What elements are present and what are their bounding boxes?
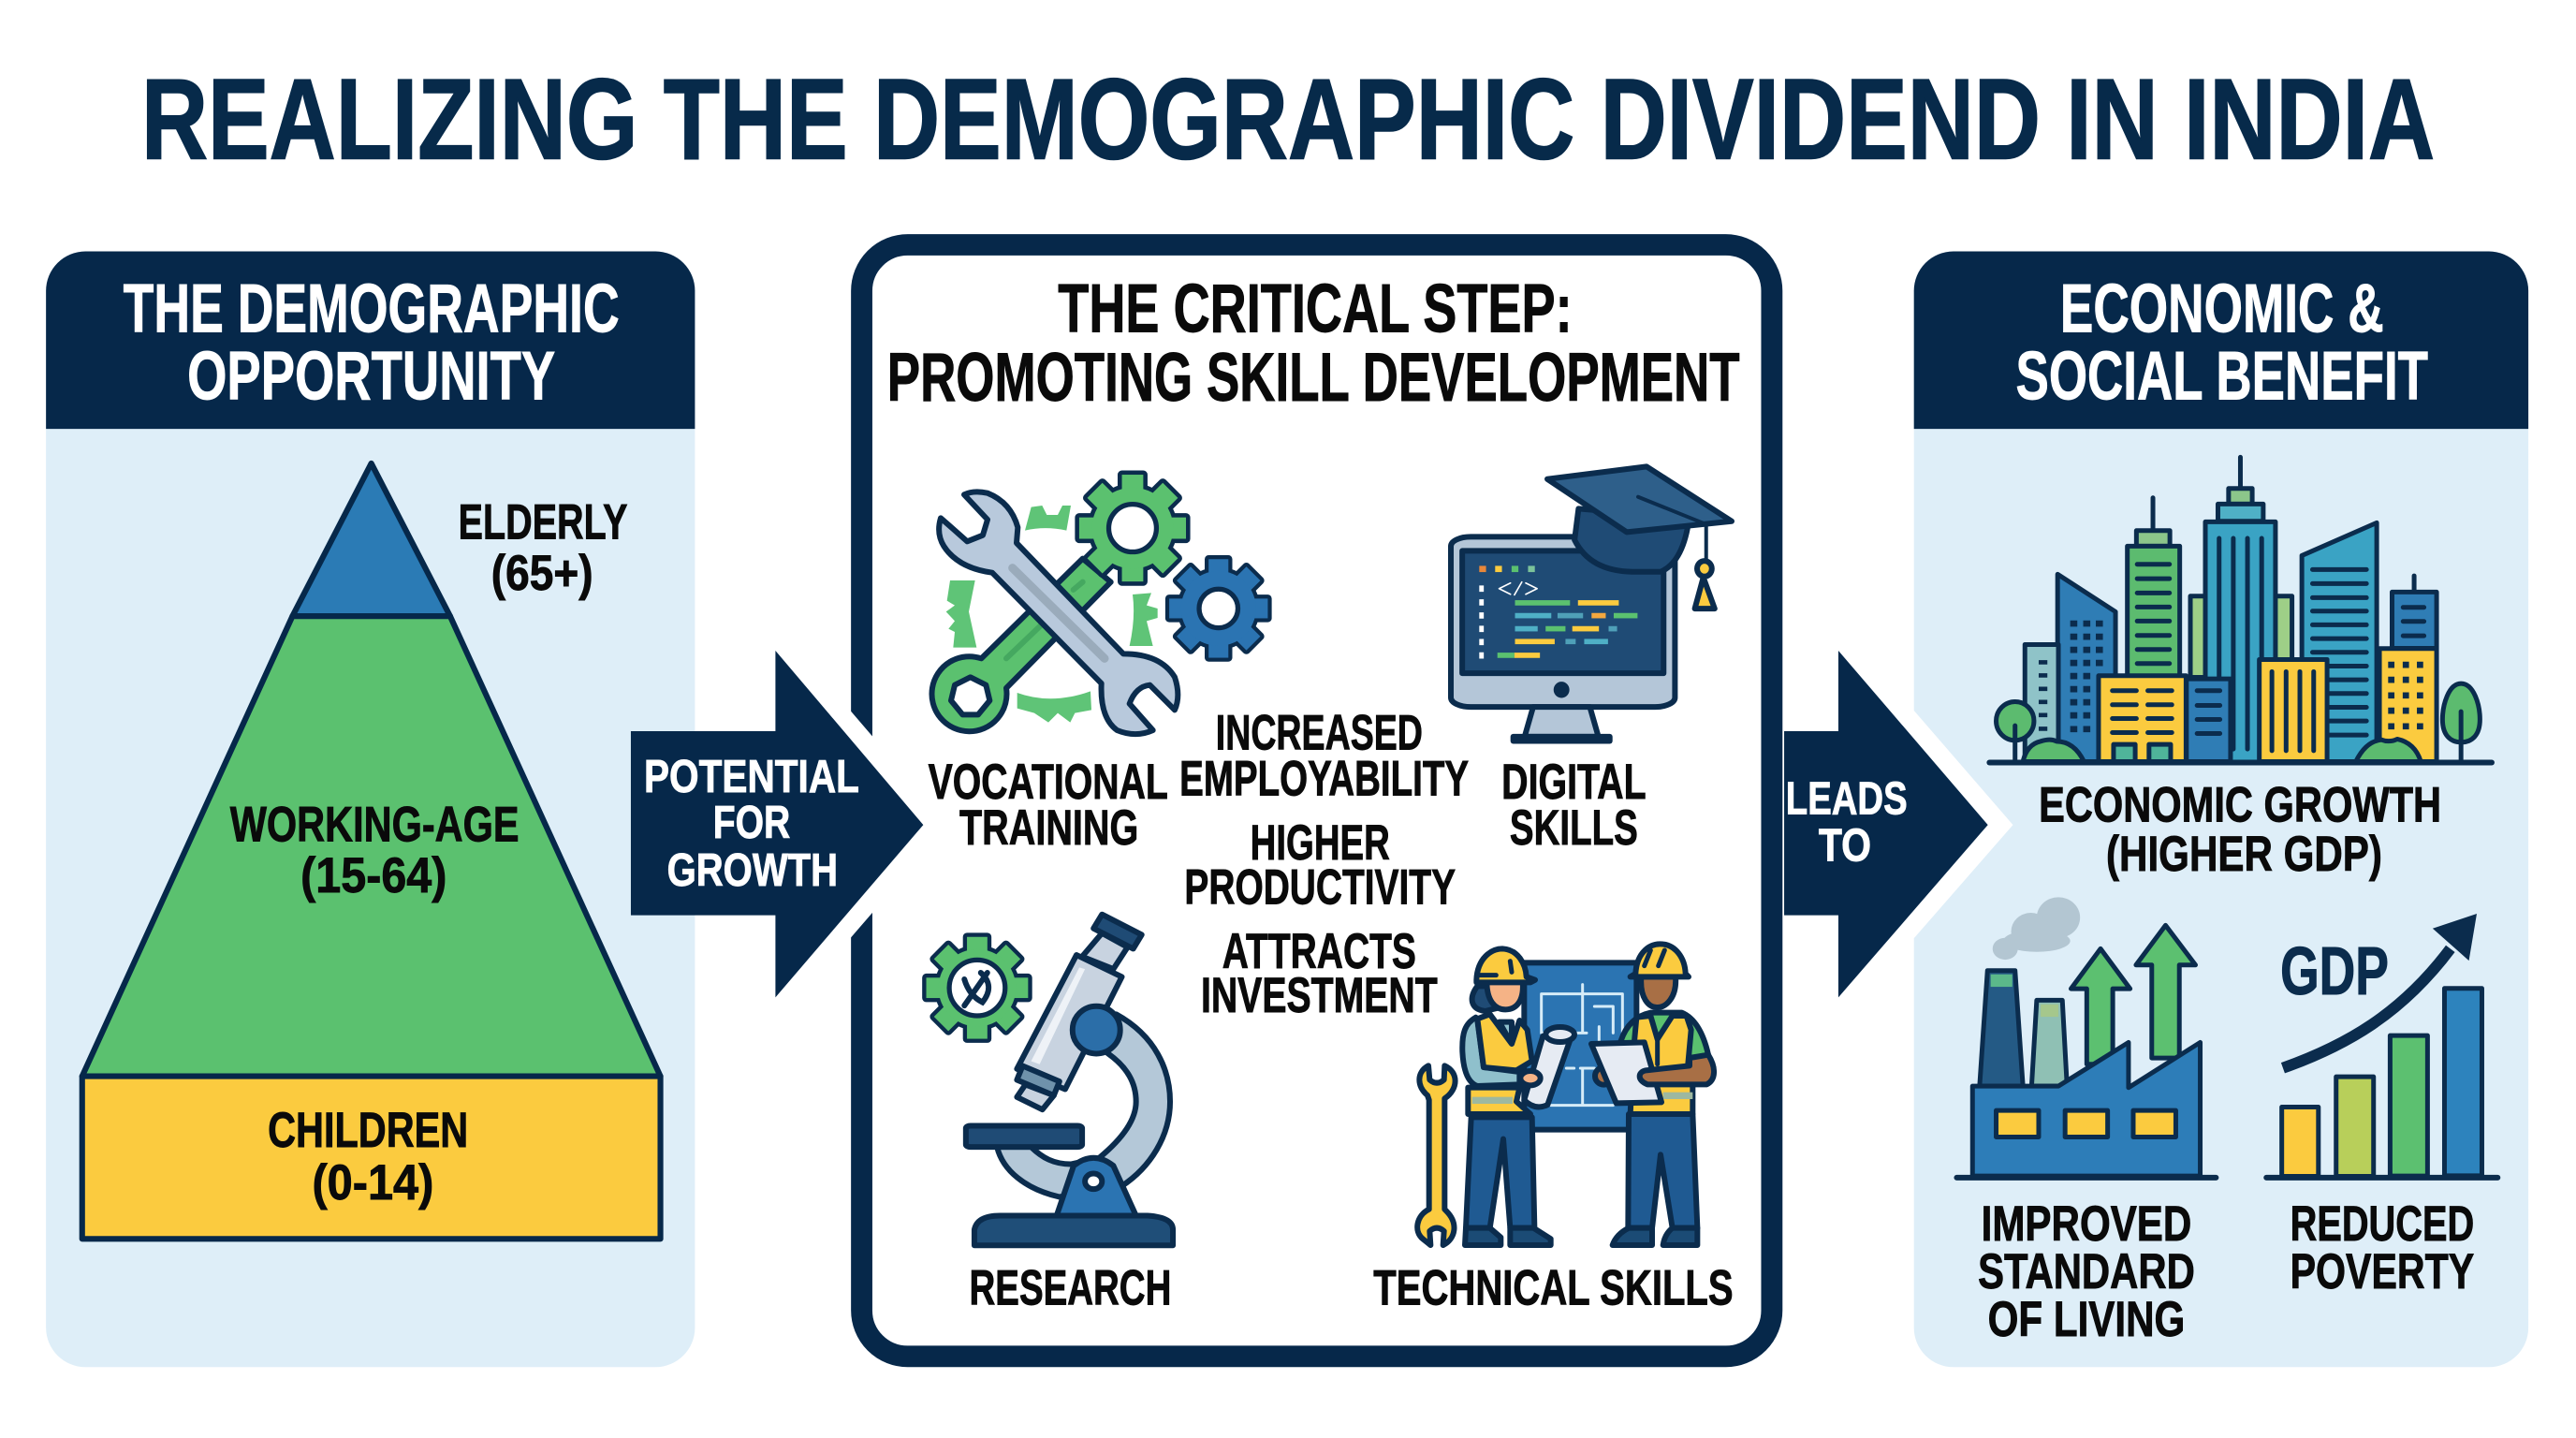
arrow: leads to: TO — [1819, 821, 1871, 872]
icon: wrenches and gears — [931, 475, 1267, 734]
text block: outcomes of skill development: EMPLOYABILITY — [1179, 751, 1469, 806]
label: digital skills: DIGITAL — [1501, 755, 1647, 810]
label: digital skills: SKILLS — [1510, 800, 1638, 856]
label: improved standard of living: OF LIVING — [1988, 1292, 2185, 1347]
label: working-age: (15-64) — [300, 848, 446, 903]
panel heading: economic and social benefit — [2016, 270, 2428, 414]
label: elderly: (65+) — [491, 546, 593, 601]
figure: right engineer — [1591, 944, 1714, 1245]
text block: outcomes of skill development: PRODUCTIVITY — [1184, 859, 1456, 915]
panel heading: economic and social benefit: ECONOMIC & — [2060, 270, 2384, 347]
label: research: RESEARCH — [970, 1261, 1171, 1316]
panel heading: economic and social benefit: SOCIAL BENEFIT — [2016, 336, 2428, 414]
label: economic growth — [2039, 778, 2441, 882]
label: elderly: ELDERLY — [459, 495, 627, 550]
panel heading: the demographic opportunity — [124, 270, 620, 414]
label: technical skills: TECHNICAL SKILLS — [1373, 1261, 1734, 1316]
arrow: leads to — [1784, 640, 1998, 1007]
label: digital skills — [1501, 755, 1647, 856]
panel heading: promoting skill development: THE CRITICAL STEP: — [1058, 270, 1573, 347]
panel heading: the demographic opportunity: THE DEMOGRAPHIC — [124, 270, 620, 347]
arrow: potential for growth: POTENTIAL — [644, 752, 859, 802]
label: economic growth: (HIGHER GDP) — [2106, 827, 2382, 882]
label: vocational training: VOCATIONAL — [929, 755, 1168, 810]
panel: the demographic opportunity — [46, 252, 695, 1367]
text block: outcomes of skill development — [1179, 705, 1469, 1023]
icon: computer with graduation cap — [1451, 466, 1732, 741]
panel: the critical step — [862, 245, 1772, 1357]
label: vocational training — [929, 755, 1168, 856]
text block: outcomes of skill development: ATTRACTS — [1222, 924, 1416, 979]
label: vocational training: TRAINING — [959, 800, 1138, 856]
label: children: CHILDREN — [268, 1103, 468, 1158]
icon: gdp bar chart with rising arrow — [2266, 914, 2497, 1178]
panel heading: promoting skill development: PROMOTING SKILL DEVELOPMENT — [887, 338, 1740, 416]
panel heading: promoting skill development — [887, 270, 1740, 416]
label: improved standard of living: IMPROVED — [1982, 1196, 2191, 1252]
arrow: potential for growth: FOR — [713, 798, 790, 848]
label: working-age — [230, 798, 520, 903]
icon: microscope with gear — [927, 915, 1173, 1245]
label: reduced poverty — [2291, 1196, 2474, 1299]
text block: outcomes of skill development: HIGHER — [1251, 815, 1390, 871]
label: working-age: WORKING-AGE — [230, 798, 520, 853]
panel: economic and social benefit — [1914, 252, 2528, 1367]
label: reduced poverty: POVERTY — [2291, 1244, 2474, 1299]
label: children — [268, 1103, 468, 1211]
label: improved standard of living: STANDARD — [1978, 1244, 2195, 1299]
label: elderly — [459, 495, 627, 601]
arrow: potential for growth — [631, 640, 933, 1007]
label: children: (0-14) — [312, 1155, 433, 1211]
label: economic growth: ECONOMIC GROWTH — [2039, 778, 2441, 833]
label: reduced poverty: REDUCED — [2291, 1196, 2474, 1252]
text block: outcomes of skill development: INVESTMENT — [1201, 968, 1438, 1023]
panel heading: the demographic opportunity: OPPORTUNITY — [187, 336, 555, 414]
arrow: leads to: LEADS — [1786, 774, 1908, 825]
chart: population pyramid — [82, 463, 661, 1239]
icon: factory with rising arrows — [1956, 897, 2216, 1178]
figure: left engineer — [1462, 948, 1551, 1245]
label: improved standard of living — [1978, 1196, 2195, 1347]
icon: gdp bar chart with rising arrow: GDP — [2280, 934, 2389, 1009]
icon: engineers with blueprint and wrench — [1417, 944, 1714, 1245]
icon: city skyline — [1989, 457, 2492, 762]
arrow: potential for growth: GROWTH — [667, 845, 838, 896]
text block: outcomes of skill development: INCREASED — [1216, 705, 1423, 760]
